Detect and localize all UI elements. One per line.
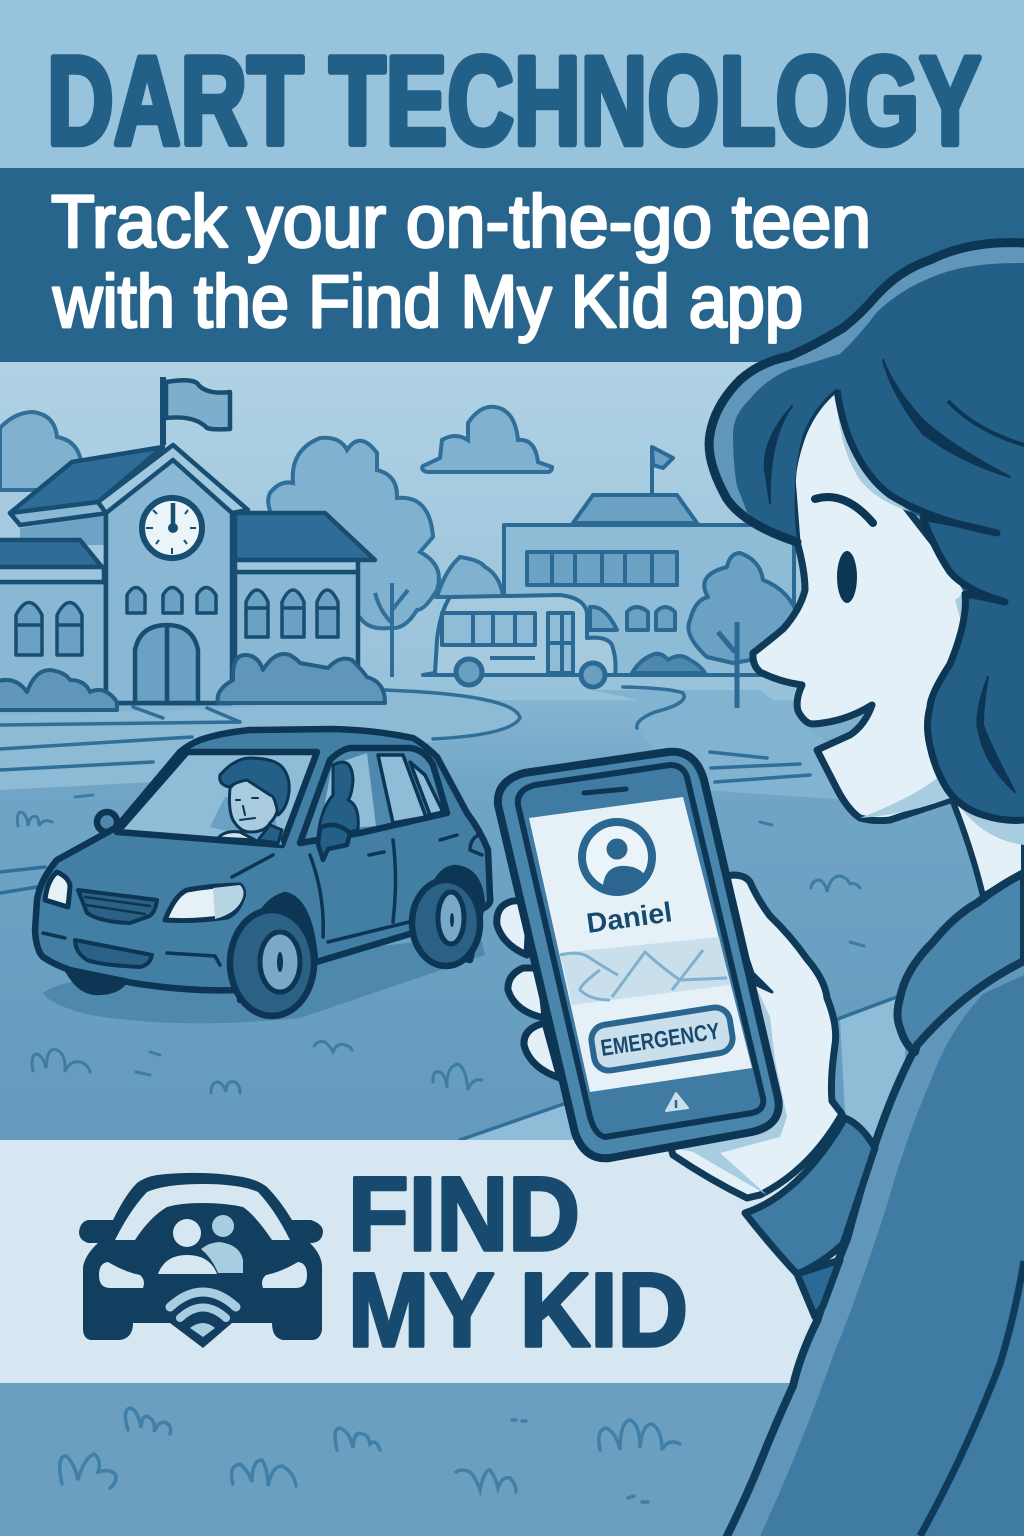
face shadow (837, 403, 968, 818)
logo: wordmark: FIND (348, 1156, 580, 1273)
woman: eye (837, 551, 857, 603)
woman: torso (725, 873, 1024, 1536)
main school building (0, 377, 375, 704)
grass tufts in field (17, 795, 864, 1093)
trees and cloud behind school (0, 407, 552, 677)
logo: wordmark (348, 1156, 688, 1369)
bushes (0, 654, 385, 710)
car (35, 729, 490, 1016)
phone: name: Daniel (585, 896, 674, 939)
woman: neck (945, 795, 1024, 896)
school bus (423, 595, 616, 687)
car: front wheel (230, 895, 315, 1016)
logo: wordmark: MY KID (348, 1252, 688, 1369)
woman: cuff (745, 1118, 875, 1317)
phone: avatar (582, 822, 652, 892)
phone: emergency button (589, 1005, 735, 1073)
hand shadow (640, 980, 787, 1195)
woman: face (753, 388, 1000, 821)
top title background (0, 0, 1024, 168)
bottom grass strip (0, 1383, 1024, 1536)
lower white banner (0, 1140, 1024, 1383)
fingers (497, 900, 560, 1078)
right tree and bush (632, 553, 800, 708)
scene background: ground and roads (0, 687, 1024, 1145)
subtitle banner: with the Find My Kid app (52, 260, 803, 343)
woman: hand (600, 875, 842, 1198)
subtitle banner: Track your on-the-go teen (51, 180, 871, 263)
phone: warning icon (666, 1093, 688, 1111)
woman: eyebrow (815, 497, 873, 523)
hand wrinkle (745, 950, 772, 992)
scene background: sky (0, 362, 1024, 707)
far school building (504, 447, 794, 675)
phone (498, 752, 779, 1158)
logo: car icon (79, 1173, 323, 1348)
woman: light hair band (709, 243, 1024, 540)
car shadow (43, 935, 485, 1023)
phone: emergency button: EMERGENCY (599, 1017, 721, 1061)
car: driver (218, 758, 289, 843)
car: rear wheel (412, 868, 482, 966)
woman: hair (709, 243, 1024, 820)
subtitle banner (0, 168, 1024, 362)
phone: map (560, 937, 730, 1005)
